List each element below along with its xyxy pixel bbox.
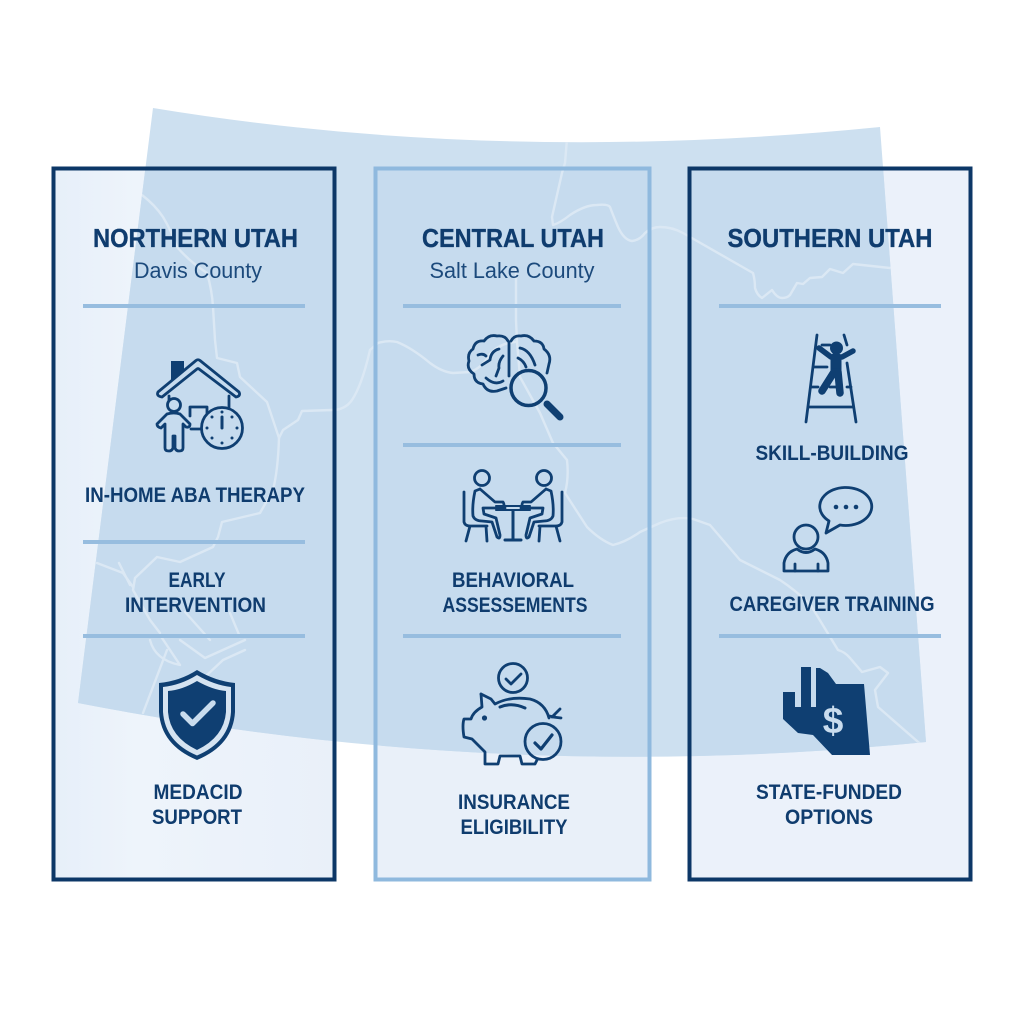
label: Skill-Building: SKILL-BUILDING (756, 442, 908, 465)
panel: Southern Utah (690, 168, 970, 880)
heading: Northern Utah: NORTHERN UTAH (93, 223, 298, 253)
heading: Southern Utah: SOUTHERN UTAH (728, 223, 932, 253)
icon: brain with magnifier (468, 336, 560, 417)
panel: Central Utah (376, 168, 650, 880)
label: Medicaid Support: MEDACID (154, 781, 242, 804)
label: Behavioral Assessments: BEHAVIORAL (452, 569, 574, 592)
label line 2: SUPPORT (152, 806, 242, 829)
divider (83, 540, 305, 544)
label line 2: OPTIONS (785, 806, 873, 829)
icon: hand with dollar sign: $ (823, 700, 844, 741)
map of Utah background (78, 108, 926, 757)
divider (719, 304, 941, 308)
label: State-Funded Options: STATE-FUNDED (756, 781, 902, 804)
panel: Northern Utah (54, 168, 334, 880)
label: Caregiver Training: CAREGIVER TRAINING (730, 593, 934, 616)
divider (719, 634, 941, 638)
divider (403, 304, 621, 308)
subheading: Davis County: Davis County (134, 258, 262, 283)
icon: piggy bank with checks (463, 664, 561, 764)
panel backgrounds (52, 167, 972, 881)
subheading: Salt Lake County: Salt Lake County (430, 258, 594, 283)
label line 2: ASSESSEMENTS (442, 594, 588, 617)
label line 2: INTERVENTION (125, 594, 266, 617)
icon: home with child and clock (157, 360, 242, 451)
icon: child climbing ladder (806, 335, 856, 422)
label line 2: ELIGIBILITY (460, 816, 568, 839)
divider (83, 634, 305, 638)
icon: shield with check (159, 670, 235, 760)
divider (403, 443, 621, 447)
label: Insurance Eligibility: INSURANCE (458, 791, 570, 814)
label: In-Home ABA Therapy: IN-HOME ABA THERAPY (85, 484, 305, 507)
divider (403, 634, 621, 638)
icon: person with speech bubble (784, 487, 872, 571)
divider (83, 304, 305, 308)
icon: hand with dollar sign (783, 667, 870, 755)
label: Early Intervention: EARLY (168, 569, 226, 592)
icon: two people at table (464, 470, 562, 541)
heading: Central Utah: CENTRAL UTAH (422, 223, 604, 253)
